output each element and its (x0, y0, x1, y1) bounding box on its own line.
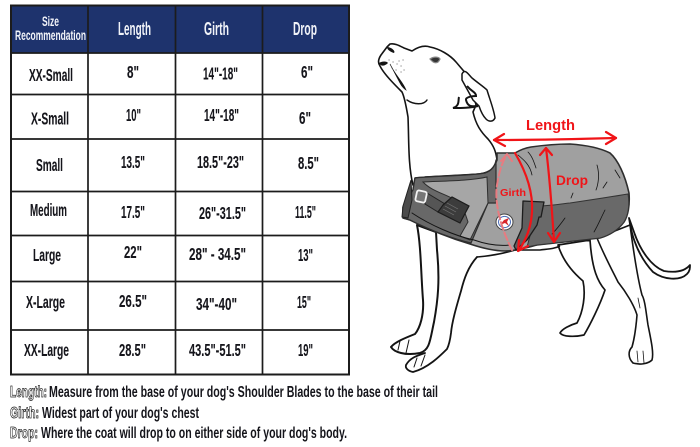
near front paw toes (414, 355, 425, 367)
row: X-Large: 15" (297, 292, 311, 312)
far front paw toes (398, 340, 409, 353)
dog head and neck (378, 44, 497, 185)
drop label: Drop (556, 172, 588, 188)
table body (11, 53, 349, 374)
row: X-Large: 34"-40" (196, 294, 237, 314)
row: XX-Large: 19" (298, 340, 313, 360)
length note: Length: (10, 384, 47, 401)
row: Small: Small (36, 155, 63, 175)
row: XX-Large (24, 340, 313, 360)
row: Large (33, 242, 313, 265)
row: X-Small (31, 105, 311, 128)
legend notes (10, 384, 438, 442)
row: Large: 28" - 34.5" (189, 244, 246, 264)
drop arrow (540, 148, 560, 242)
size table (11, 6, 349, 374)
row: X-Small: 14"-18" (204, 105, 239, 125)
coat lower dark panel (527, 194, 629, 247)
coat fold lines (518, 152, 620, 234)
near hind leg (597, 225, 653, 364)
belly line (477, 246, 560, 257)
row: XX-Small: 8" (127, 62, 139, 82)
near front leg and belly (406, 240, 477, 372)
row: Medium: Medium (30, 200, 67, 220)
row: Small: 8.5" (298, 153, 319, 173)
row: XX-Large: 28.5" (119, 340, 146, 360)
dog illustration (378, 44, 690, 372)
row: X-Small: X-Small (31, 108, 69, 128)
row: Large: 13" (298, 245, 313, 265)
row: Small: 18.5"-23" (197, 152, 244, 172)
row: XX-Small (29, 62, 313, 85)
row: Medium (30, 200, 316, 223)
header labels: Recommendation (15, 27, 86, 43)
length note (10, 384, 438, 401)
header labels (15, 13, 317, 43)
row: X-Large: X-Large (26, 292, 65, 312)
row: XX-Large: XX-Large (24, 340, 69, 360)
header labels: Girth (204, 19, 229, 39)
girth note (10, 405, 199, 422)
ear (462, 71, 495, 121)
coat hem stripe (412, 213, 510, 245)
row: Large: 22" (124, 242, 142, 262)
row: Medium: 11.5" (295, 202, 316, 222)
muzzle whisker dots (389, 60, 404, 72)
eye (430, 57, 440, 63)
row: XX-Small: 14"-18" (203, 64, 238, 84)
mouth line (390, 64, 406, 90)
far hind leg (558, 240, 605, 336)
girth arrow back dashed (496, 154, 512, 250)
chest strap (425, 193, 445, 212)
row: XX-Large: 43.5"-51.5" (189, 340, 246, 360)
row: Small: 13.5" (121, 152, 145, 172)
header labels: Length (118, 19, 151, 39)
throat crease (407, 100, 427, 104)
header labels: Drop (293, 19, 317, 39)
belly straps (514, 201, 544, 250)
velcro pad ribs (443, 203, 458, 215)
drop note: Drop: (10, 425, 38, 442)
coat front dark panel (403, 160, 496, 243)
drop note: Where the coat will drop to on either side of your dog's body. (41, 425, 347, 442)
nose and muzzle marks (379, 47, 394, 66)
row: X-Large: 26.5" (119, 291, 147, 311)
table header band (11, 6, 349, 53)
collar strap (402, 180, 412, 218)
dog tail (629, 218, 690, 279)
length label: Length (526, 117, 575, 134)
header labels: Size (42, 13, 59, 29)
row: XX-Small: 6" (301, 62, 313, 82)
girth arrow front (515, 153, 532, 251)
far front leg (391, 225, 438, 354)
row: X-Small: 10" (126, 105, 141, 125)
girth note: Widest part of your dog's chest (42, 405, 199, 422)
row: Medium: 26"-31.5" (199, 203, 246, 223)
length note: Measure from the base of your dog's Shoulder Blades to the base of their tail (49, 384, 438, 401)
coat body (403, 144, 629, 251)
row: XX-Small: XX-Small (29, 65, 73, 85)
measurement arrows (494, 132, 616, 251)
girth label: Girth (500, 187, 526, 199)
near hind paw toes (637, 298, 644, 363)
logo badge (496, 214, 513, 230)
row: Small (36, 152, 319, 175)
collar buckle (415, 190, 427, 203)
row: Large: Large (33, 245, 61, 265)
inner ear shadow (453, 86, 478, 108)
drop note (10, 425, 347, 442)
velcro pad (438, 197, 469, 223)
girth note: Girth: (10, 405, 39, 422)
row: X-Small: 6" (299, 108, 311, 128)
row: X-Large (26, 291, 311, 314)
coat chest light panel (423, 177, 488, 240)
row: Medium: 17.5" (121, 202, 145, 222)
length arrow (494, 132, 616, 146)
